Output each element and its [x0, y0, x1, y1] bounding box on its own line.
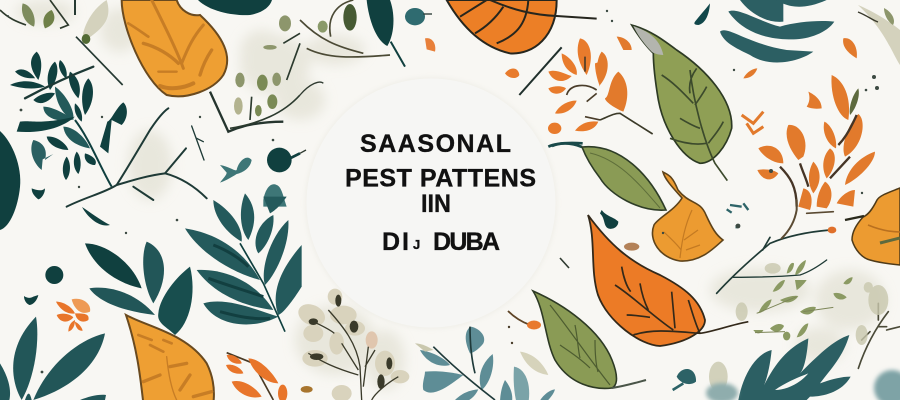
cluster: pale teal sprig bottom-centre — [415, 327, 555, 400]
leaf: green large top-right — [632, 25, 732, 181]
leaf: orange far-right — [845, 188, 900, 265]
leaf: green bottom-center — [533, 291, 646, 388]
cluster: bottom-left leaves — [0, 317, 106, 400]
cluster: orange flowers right — [597, 37, 875, 210]
title: seasonal pest patterns: DUBA — [433, 228, 500, 256]
cluster: dark twigs right — [717, 200, 900, 368]
smudge: pale teal bottom-right — [706, 370, 900, 400]
leaf: orange large lower-right — [588, 215, 748, 346]
icon: dark dot with tail — [220, 148, 300, 207]
arc: dark leaf at left edge — [0, 131, 20, 230]
panel: centre circle — [305, 77, 557, 329]
cluster: top-left sprigs — [0, 0, 123, 85]
cluster: olive sprig beside circle — [230, 15, 300, 128]
cluster: teal fern top-right — [694, 0, 834, 62]
leaf: orange top-left — [122, 0, 283, 132]
leaf: orange top-center — [447, 0, 597, 53]
leaf: orange bottom-left — [126, 315, 214, 400]
branch: dark twig — [25, 67, 207, 207]
title: seasonal pest patterns — [345, 130, 536, 256]
cluster: olive sprigs lower-right — [600, 203, 888, 392]
leaf: green mid-right — [552, 143, 666, 210]
cluster: orange flower stem bottom-center — [226, 353, 287, 400]
cluster: teal fern bottom-right — [738, 335, 851, 400]
title: seasonal pest patterns: IIN — [421, 190, 451, 218]
leaf: beige top-right — [858, 5, 900, 65]
cluster: orange flowers top-center-right — [505, 38, 600, 147]
icon: orange flower small — [56, 299, 90, 332]
title: seasonal pest patterns: J — [413, 237, 420, 252]
cluster: top-center leaf and branches — [300, 0, 435, 153]
title: seasonal pest patterns: SAASONAL — [360, 130, 511, 158]
icon: dark fern left — [10, 52, 127, 199]
cluster: beige sprig bottom-centre — [295, 289, 409, 400]
title: seasonal pest patterns: DI — [382, 228, 409, 256]
title: seasonal pest patterns: PEST PATTENS — [345, 164, 536, 192]
cluster: bottom-left fern — [24, 242, 193, 335]
leaf: dark top sliver — [198, 0, 272, 15]
icon: small orange bud — [508, 258, 569, 344]
cluster: right fern bottom-left — [185, 193, 302, 332]
leaf: orange curled mid-right — [652, 172, 723, 261]
